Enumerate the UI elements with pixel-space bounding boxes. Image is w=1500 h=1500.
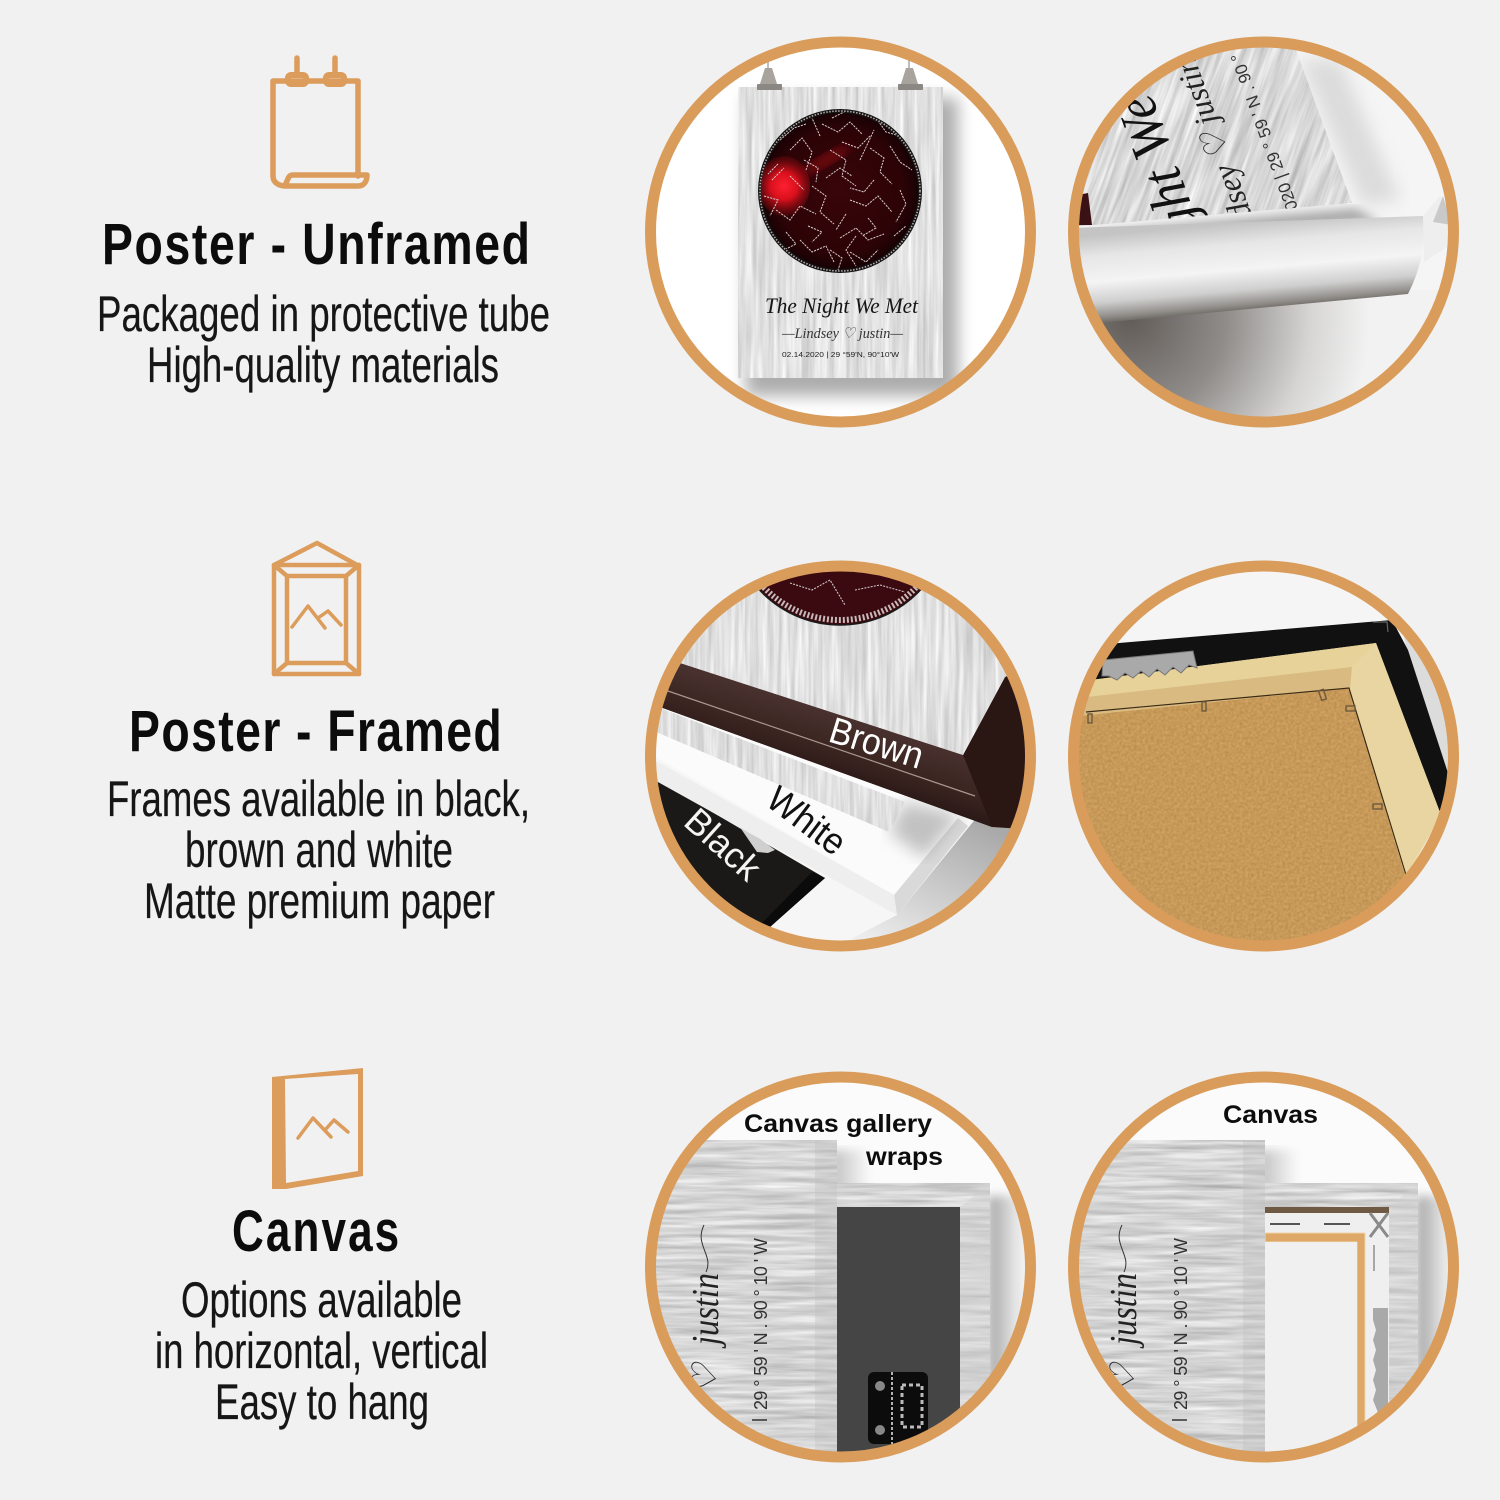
photo: gallery wrap canvas back [640,1065,1040,1486]
text: canvas details: Options available [181,1272,462,1328]
photo: back of framed poster [1060,555,1470,965]
photo frame ring [1074,1077,1454,1457]
icon: sawtooth hanger [1102,651,1197,680]
coordinates text: 29 ° 59 ' N . 90 ° 10 ' W [751,1238,771,1410]
text: poster framed details: brown and white [185,822,453,878]
photo: poster rolled on tube [1068,36,1459,428]
poster sheet [738,87,943,378]
label: canvas: Canvas [1223,1101,1318,1129]
poster date and coordinates: 02.14.2020 | 29 °59'N, 90°10'W [782,350,899,359]
heading: canvas: Canvas [232,1198,399,1263]
script text: justin: justin [685,1273,727,1349]
wooden stretcher [1265,1233,1365,1460]
icon: silver hanger [1373,1308,1388,1420]
script text: justin: justin [1103,1273,1145,1349]
poster title script: The Night We Met [765,293,919,318]
label: brown: Brown [825,709,928,777]
black frame [658,782,825,927]
icon: framed poster [274,543,359,674]
panel: canvas description [155,1068,488,1430]
upper wood print [681,572,1006,755]
photo frame ring [650,1077,1030,1457]
dark backing [837,1207,960,1467]
cork backing [1079,687,1406,940]
panel: poster unframed description [97,58,550,393]
photo: hanging poster with star map [640,30,1040,430]
brown frame [660,660,1040,830]
text: poster framed details: Matte premium paper [144,873,495,929]
label: canvas gallery wraps [744,1110,943,1171]
heading: poster framed: Poster - Framed [129,699,502,764]
label: black: Black [677,799,770,889]
white frame [658,780,968,914]
label: white: White [759,778,854,863]
icon: black sawtooth hanger [868,1372,928,1444]
canvas front face: ♡ [1105,1361,1142,1394]
icon: poster clips [757,68,923,90]
photo frame ring [650,42,1030,422]
text: poster framed details [107,771,530,929]
poster names: —Lindsey ♡ justin— [781,326,904,342]
label: canvas gallery wraps: wraps [865,1143,943,1171]
poster script text: ght We [1104,87,1212,245]
poster names: dsey ♡ justin [1167,53,1259,225]
black mat edge [1096,620,1448,811]
text: poster unframed details: Packaged in protective tube [97,286,550,342]
back frame side [837,1183,990,1470]
canvas front face [656,1140,837,1452]
cream frame [1096,643,1440,874]
star map disc [758,109,922,273]
photo frame ring [1074,566,1454,946]
back frame side [1265,1183,1418,1470]
photo: standard canvas back [1068,1072,1459,1462]
canvas front face: ♡ [687,1361,724,1394]
text: canvas details: Easy to hang [215,1374,429,1430]
icon: canvas [272,1068,363,1189]
icon: retaining clips [1088,689,1382,809]
photo frame ring [650,566,1030,946]
silver tube [1070,216,1424,326]
text: poster unframed details: High-quality materials [147,337,499,393]
label: canvas gallery wraps: Canvas gallery [744,1110,932,1138]
canvas front face [1060,1140,1265,1470]
rolled poster sheet [1079,48,1352,226]
photo frame ring [1074,42,1454,422]
text: poster unframed details [97,286,550,393]
photo: frame colour samples [645,560,1036,952]
panel: poster framed description [107,543,530,929]
lower wood print [658,709,904,832]
text: canvas details: in horizontal, vertical [155,1323,488,1379]
icon: rolled poster with clips [273,58,367,186]
heading: poster unframed: Poster - Unframed [102,212,530,277]
text: canvas details [155,1272,488,1430]
canvas interior [1265,1207,1389,1467]
star map edge [759,572,922,626]
poster coordinates: 020 | 29 ° 59 ' N . 90 ° [1227,51,1302,213]
shadow below tube [1102,299,1360,416]
text: poster framed details: Frames available in black, [107,771,530,827]
coordinates text: 29 ° 59 ' N . 90 ° 10 ' W [1171,1238,1191,1410]
